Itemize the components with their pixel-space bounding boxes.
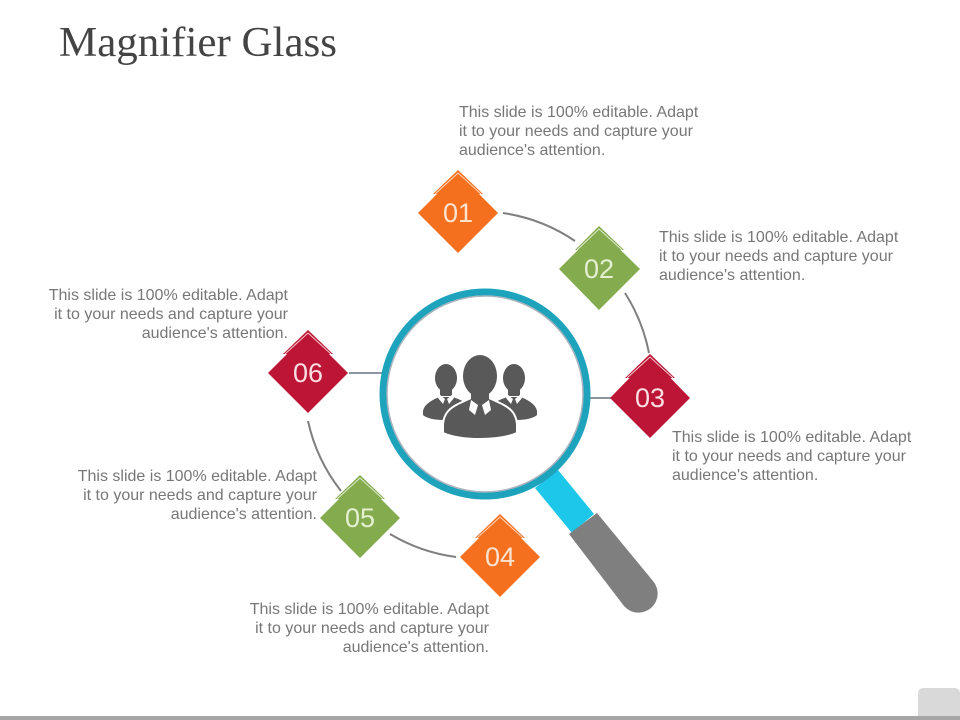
page number tab [918, 688, 960, 716]
text block 06 [49, 287, 289, 342]
text block 01 [459, 104, 699, 159]
text block 04: audience's attention. [343, 639, 489, 656]
diamond 04: 04 [485, 542, 515, 572]
text block 04: it to your needs and capture your [255, 620, 490, 637]
text block 04 [250, 601, 490, 656]
text block 06: it to your needs and capture your [54, 306, 289, 323]
text block 02: This slide is 100% editable. Adapt [659, 229, 899, 246]
diamond 06: 06 [293, 358, 323, 388]
left person [423, 364, 464, 420]
text block 03: This slide is 100% editable. Adapt [672, 429, 912, 446]
diamond 03: 03 [635, 383, 665, 413]
diamond 01: 01 [443, 198, 473, 228]
diamond 06 [268, 330, 348, 413]
diamond 05: 05 [345, 503, 375, 533]
footer bar [0, 716, 960, 720]
diamond 02 [559, 226, 640, 310]
text block 01: it to your needs and capture your [459, 123, 694, 140]
icon: business people [423, 355, 537, 439]
centre person [443, 355, 517, 439]
text block 03: audience's attention. [672, 467, 818, 484]
text block 05: This slide is 100% editable. Adapt [78, 468, 318, 485]
magnifier neck [535, 470, 594, 533]
text block 05 [78, 468, 318, 523]
text block 04: This slide is 100% editable. Adapt [250, 601, 490, 618]
text block 05: it to your needs and capture your [83, 487, 318, 504]
text block 06: audience's attention. [142, 325, 288, 342]
text block 06: This slide is 100% editable. Adapt [49, 287, 289, 304]
right person [496, 364, 537, 420]
text block 02: it to your needs and capture your [659, 248, 894, 265]
text block 03: it to your needs and capture your [672, 448, 907, 465]
text block 02: audience's attention. [659, 267, 805, 284]
diamond 01 [418, 170, 498, 253]
magnifier lens [383, 292, 587, 496]
text block 01: audience's attention. [459, 142, 605, 159]
title: Magnifier Glass [59, 20, 337, 66]
diamond 04 [460, 514, 540, 597]
diamond 03 [610, 354, 690, 438]
diamond 02: 02 [584, 254, 614, 284]
diamond 05 [320, 475, 400, 558]
magnifier glass [383, 292, 658, 613]
text block 05: audience's attention. [171, 506, 317, 523]
magnifier handle [569, 513, 658, 613]
connector arcs [308, 213, 649, 557]
text block 02 [659, 229, 899, 284]
text block 01: This slide is 100% editable. Adapt [459, 104, 699, 121]
text block 03 [672, 429, 912, 484]
